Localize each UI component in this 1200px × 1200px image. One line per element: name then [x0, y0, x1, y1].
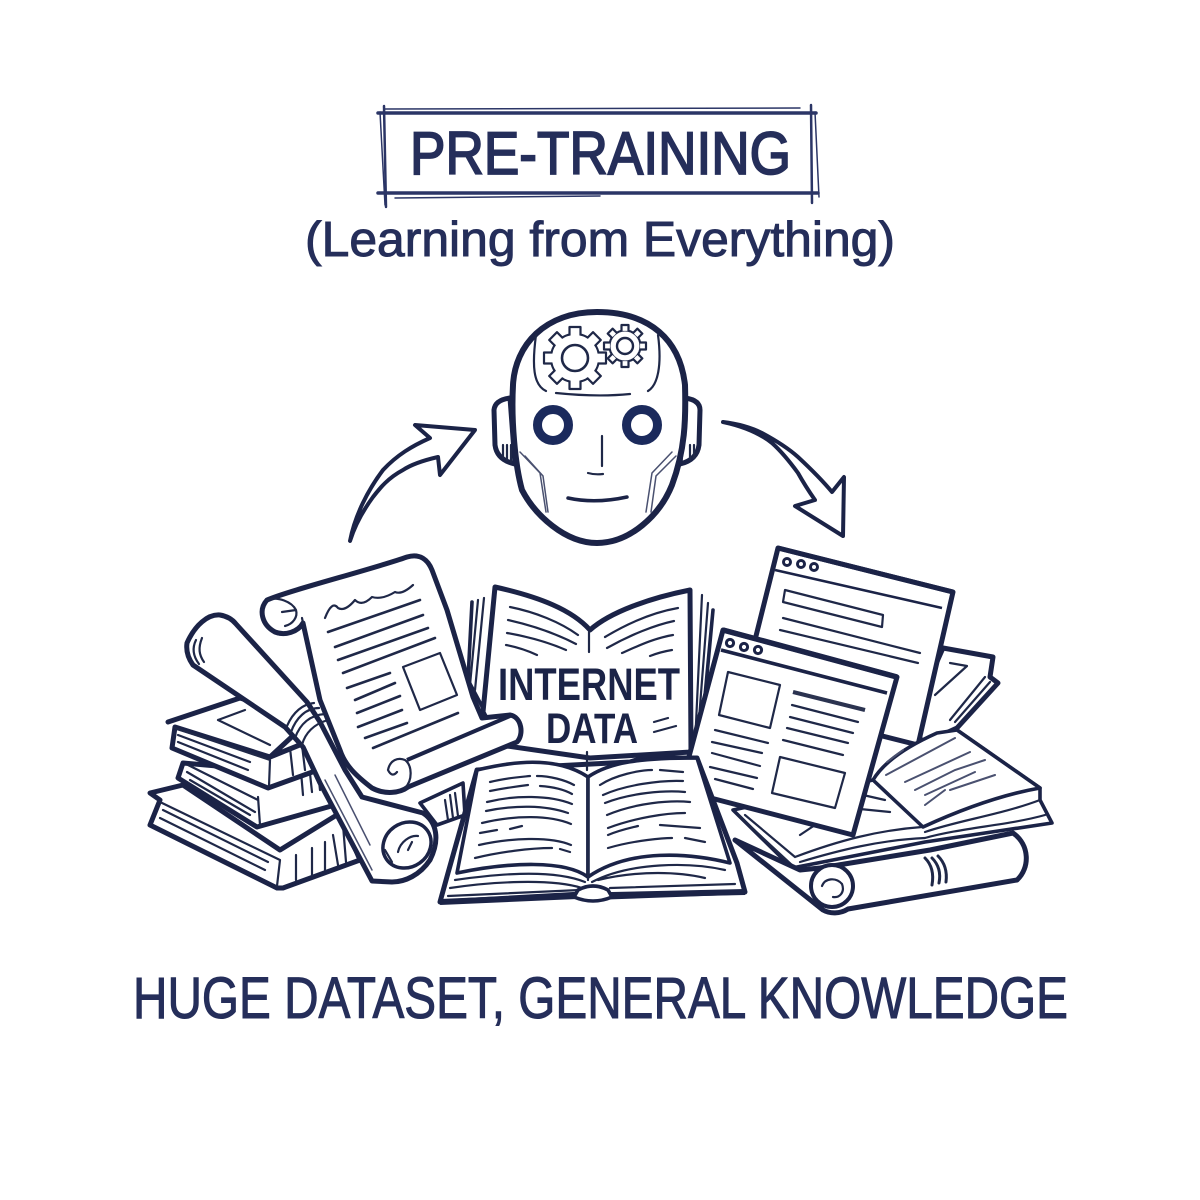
- book behind scrolls: [420, 783, 465, 825]
- arrow: down from robot: [723, 422, 844, 536]
- browser window: front: [680, 630, 897, 835]
- scroll image box: [403, 653, 457, 710]
- scroll band: [287, 703, 328, 745]
- subtitle: (Learning from Everything): [305, 213, 895, 267]
- open book right: [733, 730, 1052, 868]
- bottom book: [150, 785, 360, 888]
- text lines: [710, 705, 858, 789]
- back book pages: [483, 587, 691, 758]
- browser window: back: [740, 548, 953, 745]
- scroll: diagonal rolled: [187, 615, 440, 882]
- data word: DATA: [546, 705, 638, 753]
- image box: [719, 672, 780, 728]
- right back book: [920, 648, 998, 745]
- title text: PRE-TRAINING: [410, 120, 791, 187]
- arrow: up to robot: [350, 425, 475, 541]
- right page: [588, 758, 730, 877]
- left page: [457, 762, 588, 877]
- scroll text lines: [328, 600, 458, 748]
- right page: [873, 730, 1040, 827]
- internet data label: [498, 659, 680, 753]
- robot head: [494, 312, 700, 543]
- left eye: [538, 410, 568, 440]
- brain panel: [534, 335, 660, 395]
- window dots: [726, 639, 762, 654]
- top book: [168, 698, 318, 788]
- right ear: [680, 398, 700, 464]
- title box: [378, 105, 819, 207]
- middle book: [178, 745, 335, 827]
- window dots: [784, 558, 818, 570]
- internet data label: INTERNET: [498, 659, 680, 710]
- image box lower: [772, 757, 845, 808]
- scroll: bottom right: [735, 833, 1026, 913]
- open book front: [440, 752, 745, 902]
- scroll band: [925, 856, 946, 885]
- search box: [783, 590, 883, 627]
- nose and mouth: [588, 436, 603, 474]
- right eye: [626, 410, 658, 440]
- scroll roll end: [374, 813, 440, 877]
- book stack left: [150, 698, 465, 888]
- small gear: [604, 325, 646, 367]
- large gear: [544, 327, 606, 389]
- page edges: [448, 865, 735, 896]
- left ear: [494, 398, 515, 464]
- spine tab: [574, 886, 612, 901]
- scroll: paper with text: [262, 556, 521, 792]
- head outline: [512, 312, 685, 543]
- scroll bottom curl: [388, 759, 411, 788]
- center back book: [468, 587, 713, 758]
